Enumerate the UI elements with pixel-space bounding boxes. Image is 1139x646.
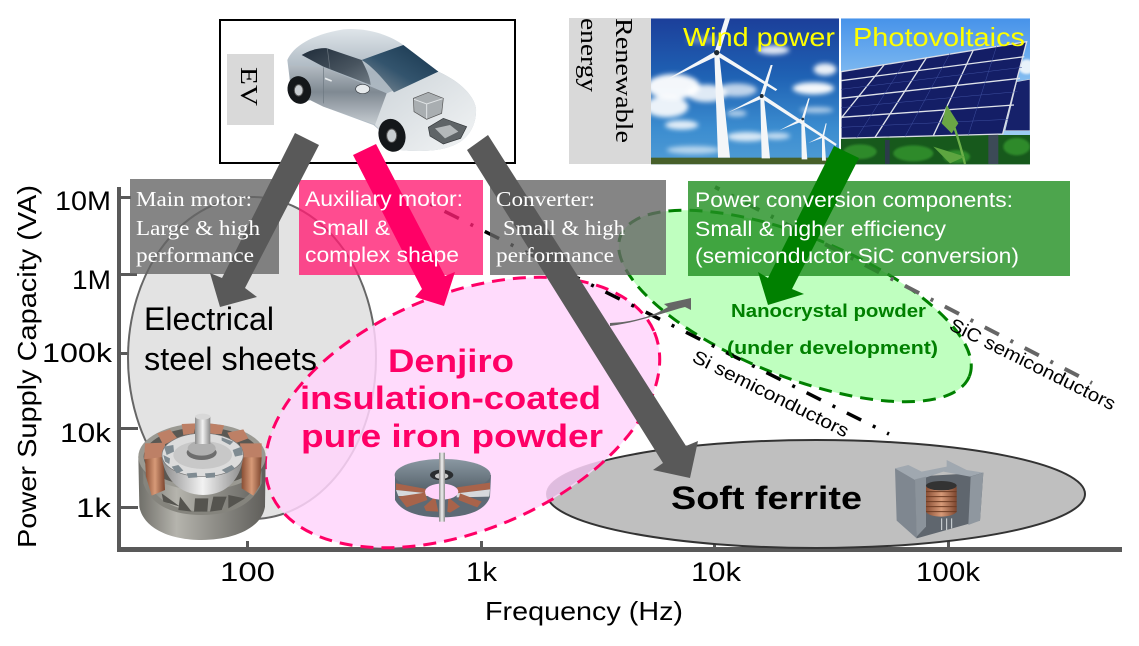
label: Si semiconductors: Si semiconductors <box>689 346 853 441</box>
label: Denjiro insulation-coated pure iron powder: pure iron powder <box>301 418 603 454</box>
region: electrical steel sheets <box>128 197 376 519</box>
label: Denjiro insulation-coated pure iron powder: insulation-coated <box>300 380 601 416</box>
image: solar panels <box>841 18 1035 165</box>
region: nanocrystal powder <box>594 171 996 441</box>
x axis tick labels: 10k <box>691 557 742 587</box>
x axis tick labels: 100 <box>220 557 275 587</box>
region: Denjiro powder <box>225 223 700 602</box>
callout text: main motor: Large & high <box>136 216 261 240</box>
y axis tick labels: 1k <box>76 493 112 523</box>
x axis tick labels <box>220 557 981 587</box>
callout text: auxiliary motor <box>305 188 463 267</box>
y axis tick labels: 10k <box>60 418 112 448</box>
y axis title: Power Supply Capacity (VA) <box>12 185 42 548</box>
label: soft ferrite: Soft ferrite <box>671 480 862 516</box>
callout text: auxiliary motor: complex shape <box>305 244 459 267</box>
callout text: power conversion components <box>695 189 1019 268</box>
arrow: auxiliary motor to Denjiro <box>353 144 455 306</box>
callout text: main motor: Main motor: <box>136 187 252 211</box>
callout background: converter <box>490 180 666 275</box>
label: nanocrystal powder <box>727 301 938 358</box>
callout background: main motor <box>130 179 279 274</box>
y axis tick labels <box>42 186 113 523</box>
callout text: converter: Small & high <box>503 216 626 240</box>
panel: renewable energy <box>569 18 1035 165</box>
arrow: main motor to electrical steel <box>210 133 319 307</box>
label: SiC semiconductors: SiC semiconductors <box>946 314 1119 414</box>
callout text: power conversion components: Power conversion components: <box>695 189 1013 212</box>
callout text: converter: performance <box>496 243 614 267</box>
icon: car cutaway <box>284 29 476 155</box>
x axis tick labels: 100k <box>916 557 981 587</box>
callout text: auxiliary motor: Small & <box>312 217 390 240</box>
callout text: main motor <box>136 187 261 267</box>
label: renewable energy: energy <box>575 18 601 92</box>
label: nanocrystal powder: Nanocrystal powder <box>731 301 926 321</box>
label: photovoltaics: Photovoltaics <box>853 22 1025 52</box>
label: renewable energy: Renewable <box>610 18 636 143</box>
arrow: converter to soft ferrite <box>467 135 698 478</box>
label: electrical steel sheets: Electrical <box>144 301 274 337</box>
y axis tick labels: 1M <box>72 265 111 295</box>
panel: EV <box>220 20 515 163</box>
region overlap: Denjiro and ferrite <box>548 461 602 500</box>
icon: main motor <box>138 414 266 540</box>
label: renewable energy <box>569 18 651 164</box>
arrow: renewable energy to nanocrystal <box>758 146 859 305</box>
icon: ferrite inductor <box>895 460 983 538</box>
chart: frequency vs power capacity <box>12 133 1122 626</box>
icon: axial flux motor <box>395 453 491 522</box>
y axis tick labels: 10M <box>55 186 111 216</box>
y axis tick labels: 100k <box>42 338 113 368</box>
callout text: converter: Converter: <box>496 187 595 211</box>
image: wind turbines <box>645 18 839 164</box>
arrow: to nanocrystal region <box>610 298 691 326</box>
label: electrical steel sheets: steel sheets <box>144 341 317 377</box>
callout background: auxiliary motor <box>299 180 483 275</box>
line: SiC semiconductors limit <box>715 187 1092 383</box>
callout text: power conversion components: (semiconductor SiC conversion) <box>695 245 1019 268</box>
label: wind power: Wind power <box>683 22 835 52</box>
axes and tick marks <box>117 187 1122 552</box>
callout text: converter <box>496 187 626 267</box>
x axis title: Frequency (Hz) <box>485 596 683 626</box>
line: Si semiconductors limit <box>422 200 889 434</box>
callout text: auxiliary motor: Auxiliary motor: <box>305 188 463 211</box>
label: Denjiro insulation-coated pure iron powder: Denjiro <box>388 343 514 379</box>
callout text: power conversion components: Small & higher efficiency <box>695 218 947 241</box>
label: electrical steel sheets <box>144 301 317 377</box>
callout background: power conversion components <box>688 181 1070 276</box>
x axis tick labels: 1k <box>466 557 498 587</box>
label: Denjiro insulation-coated pure iron powder <box>300 343 603 454</box>
region: soft ferrite <box>547 440 1085 548</box>
label: EV <box>227 54 274 125</box>
label: EV: EV <box>235 67 261 107</box>
callout text: main motor: performance <box>136 243 254 267</box>
label: nanocrystal powder: (under development) <box>727 338 938 358</box>
